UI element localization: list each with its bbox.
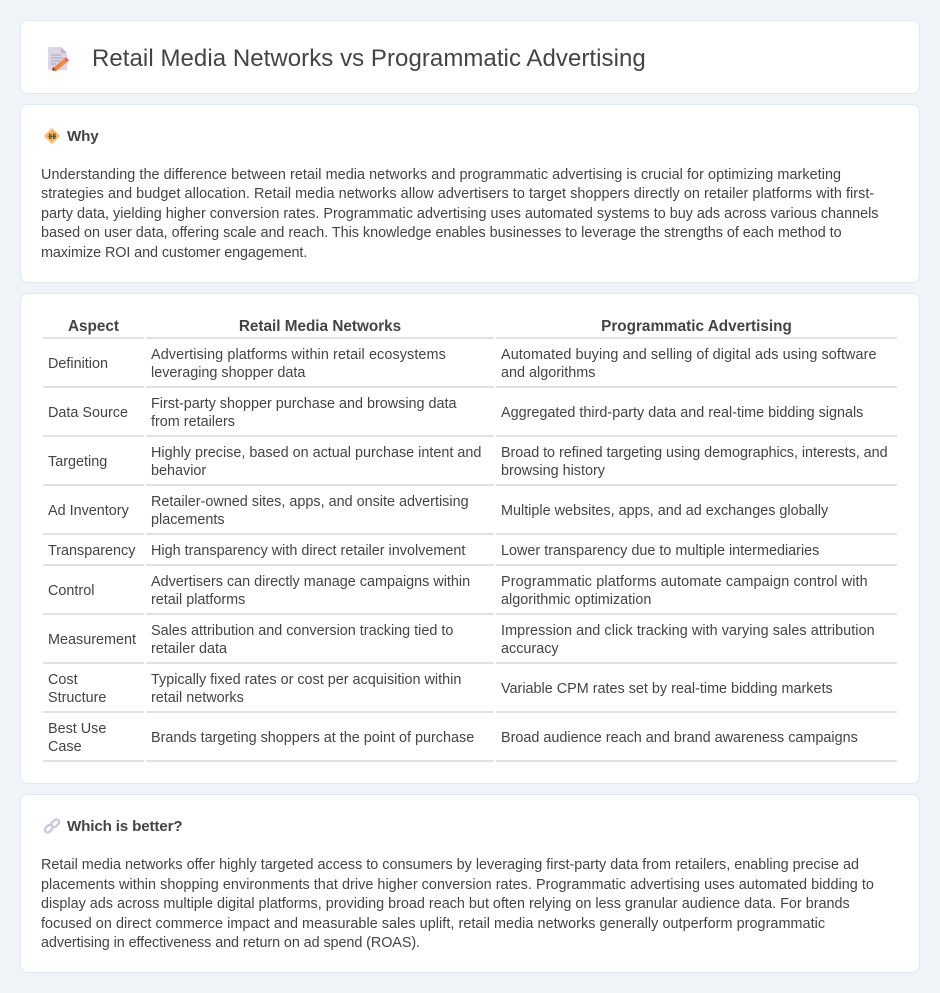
comparison table: Control — [48, 583, 94, 599]
comparison table: retail networks — [151, 690, 244, 706]
panel: comparison table — [20, 293, 920, 784]
comparison table: Aggregated third-party data and real-time bidding signals — [501, 405, 863, 421]
title: Retail Media Networks vs Programmatic Advertising — [92, 45, 646, 72]
table header: Retail Media Networks — [239, 318, 401, 335]
comparison table: placements — [151, 512, 225, 528]
text block: which is better: display ads across multiple digital platforms, providing broad reach but often relying on less granular audience data. For brands — [41, 896, 850, 912]
comparison table: Variable CPM rates set by real-time bidding markets — [501, 681, 833, 697]
comparison table: Retailer-owned sites, apps, and onsite advertising — [151, 494, 469, 510]
comparison table: retail platforms — [151, 592, 245, 608]
comparison table: High transparency with direct retailer involvement — [151, 543, 465, 559]
comparison table: Brands targeting shoppers at the point of purchase — [151, 730, 474, 746]
comparison table: Data Source — [48, 405, 128, 421]
table header — [68, 318, 792, 335]
panel: which is better — [20, 794, 920, 973]
text block: why — [41, 167, 878, 261]
comparison table: Typically fixed rates or cost per acquisition within — [151, 672, 461, 688]
comparison table: Cost — [48, 672, 78, 688]
comparison table: Impression and click tracking with varying sales attribution — [501, 623, 875, 639]
comparison table: Highly precise, based on actual purchase intent and — [151, 445, 481, 461]
comparison table: Ad Inventory — [48, 503, 129, 519]
comparison table: Lower transparency due to multiple intermediaries — [501, 543, 819, 559]
comparison table: Structure — [48, 690, 106, 706]
comparison table: First-party shopper purchase and browsing data — [151, 396, 457, 412]
comparison table: Multiple websites, apps, and ad exchanges globally — [501, 503, 828, 519]
text block: why: strategies and budget allocation. Retail media networks allow advertisers to target shoppers directly on retailer platforms with first- — [41, 186, 874, 202]
panel: title card — [20, 20, 920, 94]
comparison table: Advertisers can directly manage campaigns within — [151, 574, 470, 590]
comparison table: Definition — [48, 356, 108, 372]
comparison table: Targeting — [48, 454, 107, 470]
text block: which is better: focused on direct commerce impact and measurable sales uplift, retail media networks generally outperform programmatic — [41, 916, 825, 932]
comparison table: from retailers — [151, 414, 235, 430]
text block: which is better: placements within shopping environments that drive higher conversion rates. Programmatic advertising uses automated bidding to — [41, 877, 874, 893]
comparison table: Measurement — [48, 632, 136, 648]
comparison table: accuracy — [501, 641, 559, 657]
text block: why: party data, yielding higher conversion rates. Programmatic advertising uses automated systems to buy ads across various channels — [41, 206, 878, 222]
icon: link — [44, 818, 60, 834]
comparison table: Programmatic platforms automate campaign control with — [501, 574, 868, 590]
table header: Programmatic Advertising — [601, 318, 792, 335]
comparison table: Broad to refined targeting using demographics, interests, and — [501, 445, 888, 461]
heading: why: Why — [67, 128, 99, 145]
comparison table: Broad audience reach and brand awareness campaigns — [501, 730, 858, 746]
comparison table: Case — [48, 739, 82, 755]
comparison table: Sales attribution and conversion tracking tied to — [151, 623, 453, 639]
comparison table: leveraging shopper data — [151, 365, 305, 381]
comparison table: Automated buying and selling of digital ads using software — [501, 347, 877, 363]
panel: why — [20, 104, 920, 283]
text block: why: based on user data, offering scale and reach. This knowledge enables businesses to leverage the strengths of each method to — [41, 225, 842, 241]
heading: which is better: Which is better? — [67, 818, 182, 835]
table header: Aspect — [68, 318, 119, 335]
comparison table: browsing history — [501, 463, 605, 479]
text block: which is better: advertising in effectiveness and return on ad spend (ROAS). — [41, 935, 420, 951]
text block: why: Understanding the difference between retail media networks and programmatic advertising is crucial for optimizing marketing — [41, 167, 841, 183]
comparison table: algorithmic optimization — [501, 592, 651, 608]
comparison table: Best Use — [48, 721, 106, 737]
comparison table: and algorithms — [501, 365, 595, 381]
comparison table: behavior — [151, 463, 206, 479]
text block: why: maximize ROI and customer engagement. — [41, 245, 307, 261]
comparison table: Transparency — [48, 543, 135, 559]
text block: which is better: Retail media networks offer highly targeted access to consumers by leveraging first-party data from retailers, enabling precise ad — [41, 857, 859, 873]
comparison table: Advertising platforms within retail ecosystems — [151, 347, 446, 363]
icon: memo with pencil — [48, 47, 69, 72]
icon: warning diamond — [44, 128, 60, 144]
comparison table: retailer data — [151, 641, 227, 657]
